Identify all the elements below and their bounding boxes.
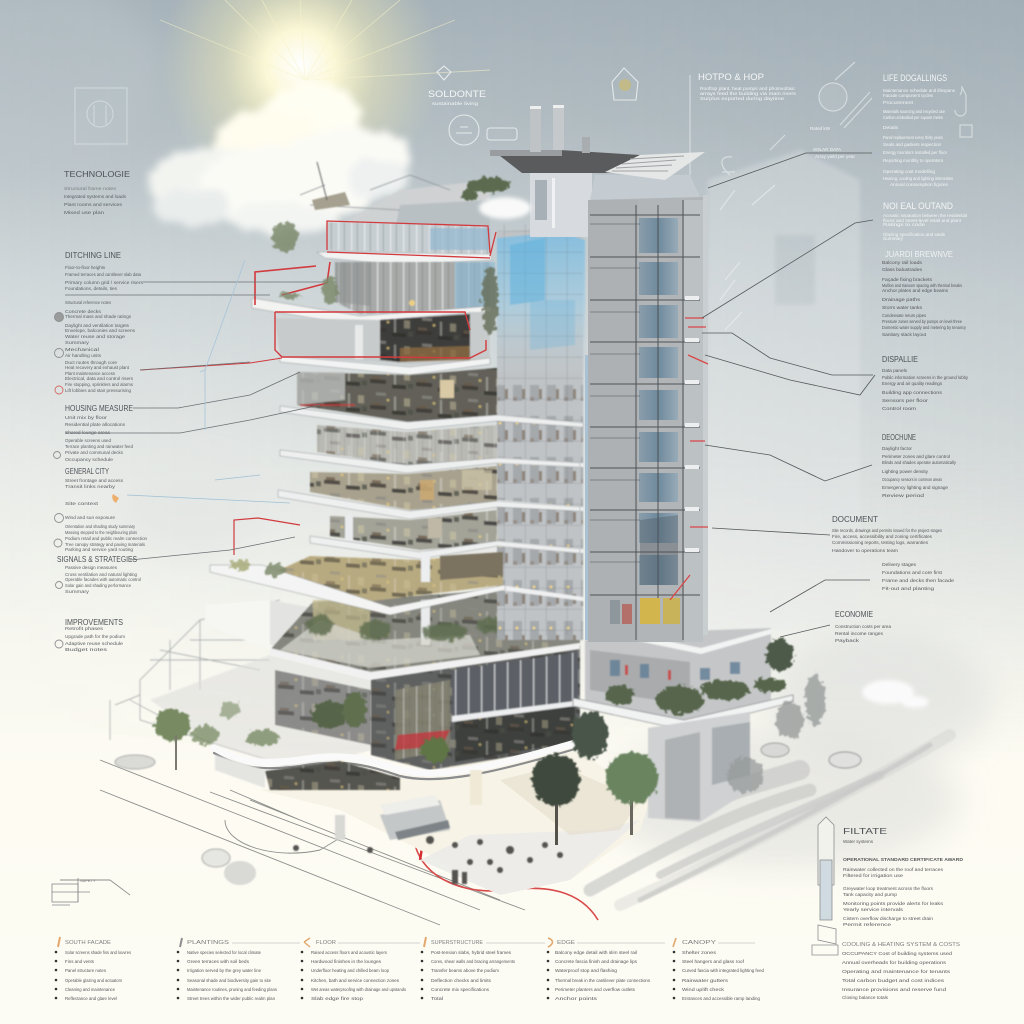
panel: left general city [65,467,148,552]
bottom column 3: FLOOR [316,940,336,946]
plaza kiosk [380,795,450,840]
panel: right document: Commissioning reports, testing logs, warranties [832,540,929,545]
panel: right display: Building app connections [882,390,943,395]
panel: bottom right costs: Total carbon budget and cost indices [842,978,945,983]
panel: left top technique: Structural frame notes [64,186,117,191]
panel: left ditching line: Water reuse and storage [65,334,126,339]
panel: left housing measure: Unit mix by floor [65,415,108,420]
floor six [310,510,580,559]
rooftop terrace sketch [300,162,490,230]
panel: right document: Site records, drawings and permits issued for the project stages [832,528,943,533]
bottom column 2: Street trees within the wider public realm plan [187,996,276,1001]
panel: right document: Delivery stages [882,562,917,567]
panel: left top technique: Integrated systems and loads [64,194,127,199]
panel: left ditching line: Plant maintenance access [65,371,116,376]
panel: top hotpo: Surplus exported during daytime [700,96,785,101]
panel: right dechune: Lighting power density [882,469,929,474]
panel: left ditching line [65,251,144,393]
floor two [275,312,490,375]
bottom column 1: SOUTH FACADE [65,940,112,946]
bottom column 6: Curved fascia with integrated lighting feed [682,968,765,973]
panel: left ditching line: Concrete decks [65,309,102,314]
panel: bottom right filtrate: Greywater loop treatment across the floors [843,886,934,891]
panel: right lifecycle: Reporting monthly to operators [883,158,944,163]
panel: right guard breakdown: Domestic water supply and metering by tenancy [882,325,967,330]
road and ground sketch [60,735,950,925]
panel: left improvements: Retrofit phases [65,626,104,631]
panel: right guard breakdown: Pressure zones served by pumps on level three [882,319,962,324]
panel: bottom right costs: Annual overheads for building operations [842,960,947,965]
panel: right guard breakdown: Mullion and transom spacing with thermal breaks [882,283,963,288]
panel: right lifecycle: Annual consumption figures [890,182,949,187]
panel: top mid label: Array yield per year [815,154,856,159]
panel: right guard breakdown: Drainage paths [882,297,921,302]
floor four [280,425,580,473]
tower main face [585,195,708,642]
panel: right dechune: Daylight factor [882,446,913,451]
bottom column 3: Underfloor heating and chilled beam loop [311,968,390,973]
panel: left ditching line: Lift lobbies and stair pressurising [65,388,132,393]
panel: right dechune: Emergency lighting and signage [882,485,949,490]
bottom column 4: Deflection checks and limits [431,978,492,983]
panel: right display: Control room [882,406,916,411]
panel: left general city: Wind and sun exposure [65,515,116,520]
panel: left ditching line: Duct routes through core [65,360,118,365]
panel: left ditching line: Foundations, details, ties [65,286,118,291]
heading: top centre logo: sustainable living [432,101,479,106]
panel: left ditching line: Envelope, balconies and screens [65,328,136,333]
panel: left signals: Cross ventilation and natural lighting [65,572,138,577]
bottom column 3: Kitchen, bath and service connection zones [311,978,400,983]
panel: top mid label: SOLAR DATA [813,147,841,152]
tree left [154,692,449,763]
panel: right display: DISPALLIE [882,355,918,364]
cloud [149,82,410,234]
panel: right dechune [882,433,957,498]
panel: left housing measure: Occupancy schedule [65,457,114,462]
panel: left general city: Tree canopy strategy and paving materials [65,542,146,547]
panel: bottom right filtrate: Yearly service intervals [843,907,904,912]
panel: right economie: Payback [835,638,860,643]
icon: small plan sketch bottom left [52,878,96,905]
panel: left general city: Podium retail and public realm connection [65,536,148,541]
panel: right lifecycle: Procurement [883,100,914,105]
panel: left signals: Summary [65,589,90,594]
panel: top hotpo: HOTPO & HOP [698,72,764,82]
panel: right guard breakdown: Balcony rail loads [882,260,923,265]
panel: right lifecycle: Maintenance schedule and lifespans [883,88,956,93]
parked car and shrub [115,743,861,885]
panel: right dechune: Occupancy sensors in common areas [882,477,943,482]
bottom column 5: Anchor points [555,996,598,1001]
panel: top hotpo: arrays feed the building via main risers [700,91,797,96]
panel: left ditching line: Floor-to-floor heights [65,265,106,270]
panel: left top technique: Mixed use plan [64,210,105,215]
bottom column 5: Perimeter planters and overflow outlets [555,987,636,992]
panel: right guard breakdown: JUARDI BREWNVE [885,250,953,259]
bottom column 4: Concrete mix specifications [431,987,490,992]
lower glass floor [371,645,580,770]
small cloud right [862,680,929,708]
bottom column 5: Waterproof stop and flashing [555,968,618,973]
panel: right lifecycle: Heating, cooling and lighting intensities [883,176,954,181]
panel: left ditching line: Primary column grid / service risers [65,280,144,285]
panel: right lifecycle [883,73,956,187]
glass wing [497,225,585,640]
panel: left ditching line: Heat recovery and exhaust plant [65,365,130,370]
panel: left ditching line: Daylight and ventilation targets [65,323,130,328]
panel: bottom right costs: Closing balance totals [842,995,889,1000]
panel: left ditching line: Structural reference notes [65,300,112,305]
bottom column 5: Thermal break in the cantilever plate connections [555,978,651,983]
panel: right noise and outland: Glazing specification and seals [883,232,946,237]
panel: bottom right filtrate: Filtered for irrigation use [843,873,904,878]
bottom column 3: Wet areas waterproofing with drainage and upstands [311,987,407,992]
panel: right document: DOCUMENT [832,515,878,524]
planter on right block [606,678,786,714]
top room [317,222,492,265]
floor five [278,466,580,519]
panel: left housing measure: Shared lounge areas [65,430,111,435]
bottom column 1: Fins and vents [65,959,95,964]
bottom column 1 [55,937,132,1001]
panel: top hotpo [698,72,797,101]
panel: right dechune: DEOCHUNE [882,433,916,442]
panel: left signals [57,555,141,594]
panel: left signals: Passive design measures [65,565,118,570]
panel: bottom right filtrate: FILTATE [843,827,887,836]
panel: bottom right filtrate: Monitoring points provide alerts for leaks [843,901,944,906]
icons: top centre badges [449,68,638,145]
ghost building behind the tower [708,150,860,640]
panel: right document: Frame and decks then facade [882,578,955,583]
panel: left top technique: TECHNOLOGIE [64,170,130,179]
panel: right lifecycle: Panel replacement every thirty years [883,135,944,140]
bottom column 1: Reflectance and glare level [65,996,117,1001]
panel: left housing measure: Private and communal decks [65,450,124,455]
panel: left ditching line: Summary [65,340,90,345]
panel: right lifecycle: Details [883,125,899,130]
bottom column 4: Cores, shear walls and bracing arrangements [431,959,516,964]
floor seven warm level [210,552,505,615]
panel: left general city: Parking and service yard routing [65,547,134,552]
bottom column 6: CANOPY [682,940,717,946]
panel: bottom right costs: OCCUPANCY Cost of building systems used [842,951,953,956]
panel: left ditching line: Electrical, data and control risers [65,376,134,381]
bottom column 3: Hardwood finishes in the lounges [311,959,382,964]
panel: right economie: ECONOMIE [835,610,873,619]
icon: small plan sketch bottom left: SAFETY [80,878,96,883]
panel: left housing measure: Operable screens used [65,438,112,443]
red pipework [140,221,496,555]
tower: right block lower level [573,628,793,730]
bottom column 2: Green terraces with soil beds [187,959,250,964]
bottom column 1: Cleaning and maintenance [65,987,116,992]
panel: left improvements: Upgrade path for the podium [65,634,125,639]
panel: right economie: Rental income ranges [835,631,884,636]
panel: left housing measure: Terrace planting and rainwater feed [65,444,134,449]
panel: left housing measure [65,404,134,462]
panel: right display: Public information screens in the ground lobby [882,375,969,380]
panel: bottom right filtrate [843,827,963,927]
panel: left general city: Orientation and shading study summary [65,524,136,529]
panel: bottom right filtrate: Rainwater collected on the roof and terraces [843,867,944,872]
panel: left improvements: IMPROVEMENTS [65,618,123,627]
panel: right noise and outland: NOI EAL OUTAND [883,201,953,211]
wavy canopy band [214,743,575,779]
panel: right lifecycle: LIFE DOGALLINGS [883,73,947,83]
panel: left general city: Site context [65,501,99,506]
leader lines left [65,260,330,560]
core and roof plant [490,105,705,237]
panel: left improvements: Adaptive reuse schedule [65,641,124,646]
panel: top hotpo: Rooftop plant, heat pumps and photovoltaic [700,86,796,91]
panel: bottom right costs: COOLING & HEATING SYSTEM & COSTS [842,942,961,948]
panel: right guard breakdown [882,250,967,337]
floor three [280,368,583,430]
panel: right guard breakdown: Glass balustrades [882,267,923,272]
panel: bottom right costs: Operating and maintenance for tenants [842,969,951,974]
panel: right display [882,355,969,411]
leader lines right [690,75,875,637]
bottom column 1: Solar screens shade fins and louvres [65,950,132,955]
panel: right display: Sensors per floor [882,398,929,403]
panel: right lifecycle: Materials sourcing and recycled use [883,109,945,114]
panel: right lifecycle: Carbon embodied per square metre [883,115,943,120]
panel: left housing measure: HOUSING MEASURE [65,404,133,413]
panel: right document: Foundations and core first [882,570,943,575]
icon: water tank diagram [812,817,838,955]
panel: left improvements: Budget notes [65,647,108,652]
panel: right economie: Construction costs per area [835,624,892,629]
bottom column 4 [421,937,545,1001]
low left terrace sketch block [110,600,371,770]
panel: left signals: SIGNALS & STRATEGIES [57,555,137,564]
bottom column 2: Irrigation served by the grey water line [187,968,262,973]
panel: right document [832,515,955,591]
panel: right guard breakdown: Sanitary stack layout [882,332,927,337]
panel: left ditching line: Framed terraces and cantilever slab data [65,272,142,277]
panel: left housing measure: Residential plate allocations [65,422,126,427]
panel: right guard breakdown: Condensate return pipes [882,313,927,318]
panel: left general city: GENERAL CITY [65,467,109,476]
roof garden planting [462,177,510,201]
panel: left ditching line: Air handling units [65,353,102,358]
bottom column 2: Seasonal shade and biodiversity gain to site [187,978,272,983]
storey eight slab and planted floor [270,590,580,680]
panel: right dechune: Blinds and shades operate automatically [882,460,957,465]
bottom column 4: Transfer beams above the podium [431,968,499,973]
bottom column 1: Panel structure notes [65,968,107,973]
panel: bottom right filtrate: OPERATIONAL STANDARD CERTIFICATE AWARD [843,857,963,862]
bottom column 6 [673,938,765,1001]
panel: bottom right filtrate: Tank capacity and pump [843,892,898,897]
panel: right noise and outland [883,201,967,241]
panel: right lifecycle: Seals and gaskets inspection [883,142,942,147]
panel: right display: Data panels [882,368,908,373]
panel: bottom right costs: Insurance provisions and reserve fund [842,987,947,992]
bottom column 5: Concrete fascia finish and drainage lips [555,959,638,964]
bottom column 6: Entrances and accessible ramp landing [682,996,761,1001]
sun glow with rays [160,0,490,205]
bottom column 6: Wind uplift check [682,987,725,992]
panel: left general city: Street frontage and access [65,478,124,483]
panel: right economie [835,610,892,643]
heading: top centre logo: SOLDONTE [428,89,486,99]
panel: right guard breakdown: Façade fixing brackets [882,277,933,282]
bottom column 2: Native species selected for local climate [187,950,262,955]
bottom column 2: Maintenance routines, pruning and feeding plans [187,987,278,992]
bottom column 4: Post-tension slabs, hybrid steel frames [431,950,512,955]
bottom column 6: Steel hangers and glass roof [682,959,745,964]
heading: top centre logo [428,66,486,106]
panel: right document: Handover to operations team [832,548,898,553]
panel: bottom right filtrate: Water systems [843,839,874,844]
bottom column 3: Slab edge fire stop [311,996,364,1001]
panel: bottom right filtrate: Cistern overflow discharge to street drain [843,916,934,921]
panel: left top technique [64,170,130,215]
panel: right guard breakdown: Storm water tanks [882,305,923,310]
panel: left ditching line: Thermal mass and shade ratings [65,314,132,319]
panel: left general city: Transit links nearby [65,484,116,489]
tower: underside wall [648,712,750,822]
bottom column 4: SUPERSTRUCTURE [431,940,484,946]
panel: right dechune: Perimeter zones and glare control [882,454,950,459]
panel: left ditching line: DITCHING LINE [65,251,121,260]
tree centre and right [175,222,825,845]
panel: right dechune: Review period [882,493,925,498]
panel: right noise and outland: Summary [883,236,904,241]
ground floor interior [215,755,482,805]
panel: right lifecycle: Facade component cycles [883,93,934,98]
panel: right guard breakdown: Anchor plates and edge beams [882,288,949,293]
panel: left top technique: Plant rooms and services [64,202,123,207]
panel: left signals: Operable facades with automatic control [65,577,141,582]
bottom column 5 [547,938,665,1001]
icon: top left seal [75,88,127,144]
bottom column 5: EDGE [557,940,576,946]
panel: right lifecycle: Operating cost modelling [883,169,936,174]
panel: left improvements [65,618,125,652]
vapour puff on roof [479,197,531,219]
panel: top mid label: Rated kW [810,126,831,131]
panel: left ditching line: Mechanical [65,347,99,352]
panel: right lifecycle: Energy monitors installed per floor [883,150,948,155]
panel: right noise and outland: floors and street-level retail and plant [883,218,962,223]
panel: bottom right filtrate: Permit reference [843,922,892,927]
bottom column 3 [301,938,420,1001]
bottom column 3: Raised access floors and acoustic layers [311,950,388,955]
faint sketch marks near the tower top [720,62,972,330]
panel: left signals: Solar gain and shading performance [65,583,132,588]
panel: right document: Fire, access, accessibility and zoning certificates [832,534,933,539]
bottom column 1: Operable glazing and actuators [65,978,123,983]
panel: right noise and outland: Ratings to code [883,222,926,227]
ground plaza [260,745,650,895]
panel: left general city: Massing stepped to the neighbouring plots [65,530,138,535]
panel: top mid label [810,126,856,159]
bottom column 2: PLANTINGS [187,940,230,946]
panel: right display: Energy and air quality readings [882,381,943,386]
bottom column 6: Shelter zones [682,950,717,955]
bottom column 4: Total [431,996,443,1001]
panel: right noise and outland: Acoustic separation between the residential [883,213,967,218]
panel: bottom right costs [842,942,961,1000]
bottom column 2 [177,938,300,1001]
icons: left panel circles [54,312,64,648]
panel: right document: Fit-out and planting [882,586,935,591]
floor one [252,262,495,326]
bottom column 5: Balcony edge detail with slim steel rail [555,950,637,955]
icon: orange marker [112,494,119,503]
bottom column 6: Rainwater gutters [682,978,729,983]
panel: left ditching line: Fire stopping, sprinklers and alarms [65,382,134,387]
